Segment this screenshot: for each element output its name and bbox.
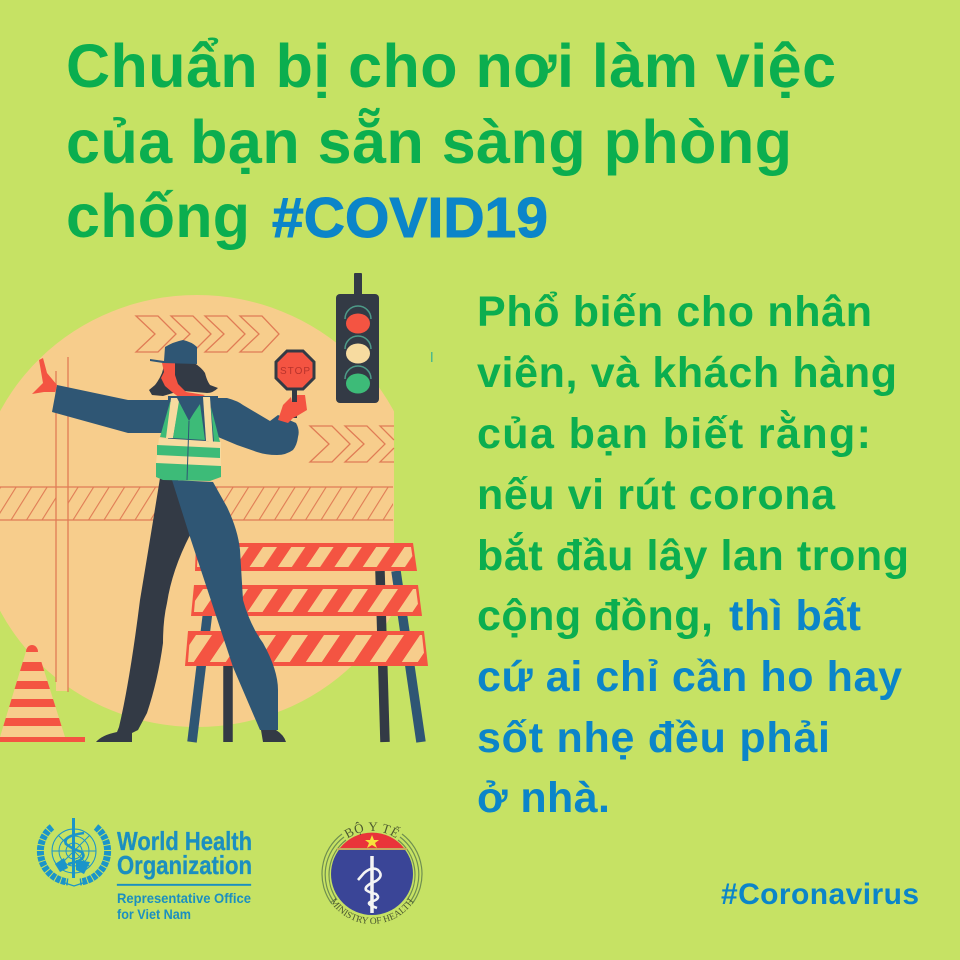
- body text: [477, 288, 909, 822]
- title: chống: [66, 182, 250, 250]
- barrier legs: [192, 571, 421, 742]
- left arm: [52, 385, 172, 433]
- face and neck: [161, 363, 205, 404]
- logo: Ministry of Health: BỘ Y TẾ: [344, 822, 401, 838]
- WHO wordmark: Representative Office: [117, 890, 251, 906]
- body text: của bạn biết rằng:: [477, 409, 871, 458]
- body text: nếu vi rút corona: [477, 471, 836, 519]
- logo: Ministry of Health: MINISTRY OF HEALTH: [330, 898, 414, 924]
- title: #COVID19: [272, 186, 548, 250]
- worker: [32, 340, 314, 742]
- left hand: [32, 358, 57, 394]
- body text: bắt đầu lây lan trong: [477, 531, 909, 580]
- shoe: [261, 730, 286, 742]
- title: Chuẩn bị cho nơi làm việc: [66, 32, 836, 100]
- body text: viên, và khách hàng: [477, 349, 897, 397]
- body text: ở nhà.: [477, 774, 610, 822]
- chevron pattern: [136, 316, 394, 462]
- WHO wordmark: Organization: [117, 850, 252, 880]
- stop sign: STOP: [280, 366, 310, 377]
- body text: cứ ai chỉ cần ho hay: [477, 653, 902, 701]
- body text: thì bất: [729, 592, 861, 640]
- right arm: [212, 398, 299, 455]
- WHO wordmark: [117, 826, 252, 922]
- WHO wordmark: for Viet Nam: [117, 906, 191, 922]
- cap: [150, 340, 197, 364]
- stop sign: [276, 351, 314, 423]
- body text: sốt nhẹ đều phải: [477, 714, 830, 762]
- barrier bars: [185, 543, 428, 666]
- hashtag: #Coronavirus: [721, 878, 919, 911]
- small mark: [431, 352, 432, 362]
- logo: World Health Organization: [40, 818, 252, 922]
- hair: [149, 362, 218, 396]
- cone: [0, 645, 85, 742]
- illustration: traffic worker with barrier: [0, 273, 432, 742]
- safety vest: [156, 397, 221, 481]
- body text: cộng đồng,: [477, 592, 713, 640]
- traffic light: [336, 273, 379, 403]
- torso: [168, 396, 218, 452]
- title: của bạn sẵn sàng phòng: [66, 108, 792, 176]
- fence: [0, 357, 393, 692]
- WHO wordmark: World Health: [117, 826, 252, 856]
- body text: Phổ biến cho nhân: [477, 288, 872, 336]
- title: [66, 32, 836, 250]
- blue leg: [172, 480, 278, 730]
- logo: Ministry of Health: [321, 822, 423, 924]
- rod of Asclepius: [358, 856, 381, 913]
- WHO emblem: [40, 818, 108, 886]
- peach background circle: [0, 295, 419, 727]
- dark leg: [96, 478, 190, 742]
